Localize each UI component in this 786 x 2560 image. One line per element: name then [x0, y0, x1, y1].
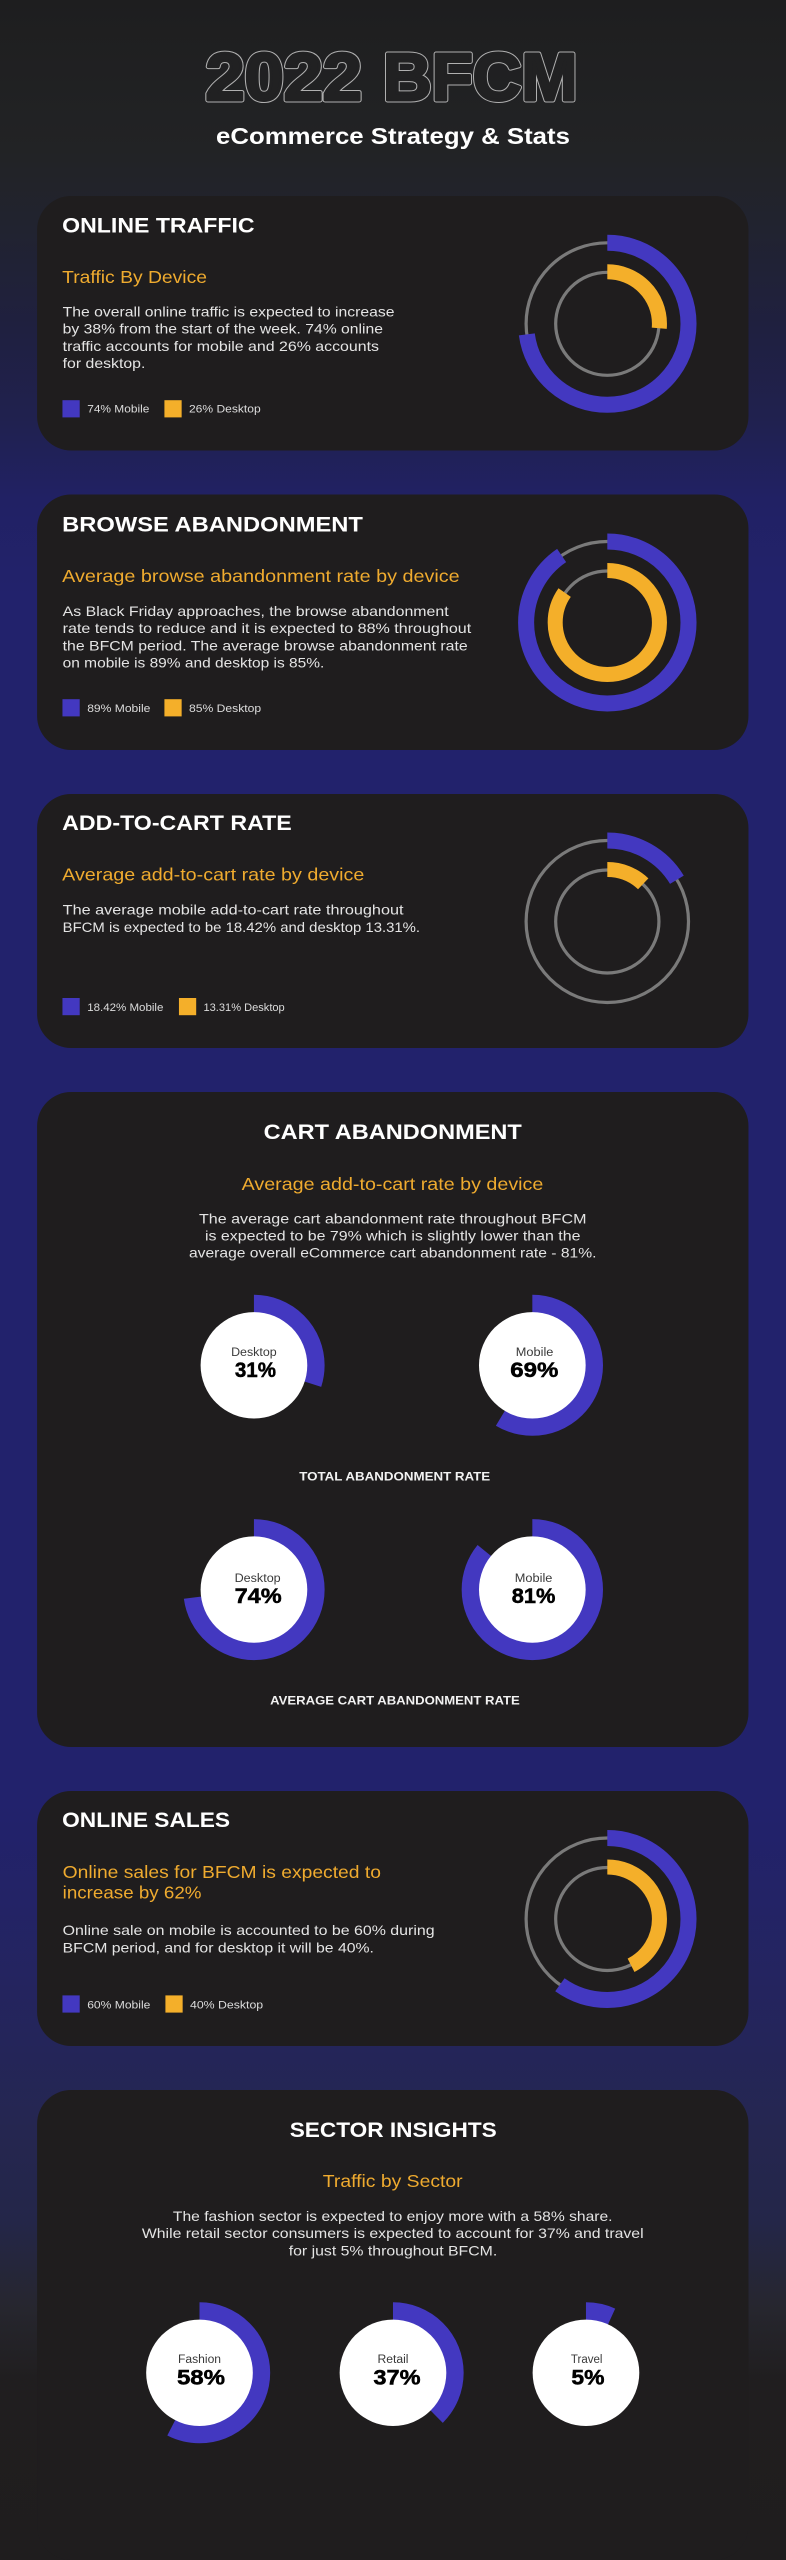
body text: BFCM is expected to be 18.42% and desktop 13.31%. — [63, 919, 420, 935]
donut: total desktop 31%: 31% — [235, 1359, 276, 1382]
heading: ONLINE TRAFFIC — [62, 215, 255, 238]
body text — [63, 1922, 435, 1956]
subheading: Average browse abandonment rate by device — [62, 566, 460, 586]
body text: the BFCM period. The average browse abandonment rate — [63, 637, 468, 653]
body text: The fashion sector is expected to enjoy more with a 58% share. — [173, 2208, 613, 2224]
subheading: Average add-to-cart rate by device — [62, 865, 365, 885]
legend: 60% Mobile — [87, 1999, 150, 2011]
heading: ADD-TO-CART RATE — [62, 812, 292, 835]
body text: is expected to be 79% which is slightly lower than the — [205, 1228, 581, 1244]
panel: add-to-cart rate — [37, 794, 748, 1048]
heading: ONLINE SALES — [62, 1809, 230, 1832]
body text: on mobile is 89% and desktop is 85%. — [63, 655, 324, 670]
body text: for just 5% throughout BFCM. — [289, 2243, 497, 2259]
heading: CART ABANDONMENT — [264, 1121, 522, 1144]
donut: average desktop 74% — [192, 1528, 316, 1651]
donut: retail 37% — [331, 2311, 455, 2434]
body text: average overall eCommerce cart abandonment rate - 81%. — [189, 1245, 596, 1261]
donut chart: traffic by device — [526, 243, 689, 405]
body text: for desktop. — [63, 355, 145, 371]
body text — [63, 303, 395, 371]
donut chart: browse abandonment — [526, 542, 689, 704]
legend: 18.42% Mobile — [87, 1002, 163, 1014]
body text — [63, 603, 471, 670]
donut: total desktop 31%: Desktop — [231, 1345, 277, 1359]
caption: average cart abandonment rate: AVERAGE CART ABANDONMENT RATE — [270, 1694, 520, 1707]
legend: 74% Mobile — [87, 404, 149, 416]
panel: online traffic — [37, 196, 748, 450]
donut: average mobile 81%: Mobile — [515, 1571, 553, 1585]
legend — [62, 1995, 263, 2013]
panel: online sales — [37, 1791, 748, 2046]
heading: BROWSE ABANDONMENT — [62, 514, 363, 537]
donut: total mobile 69%: Mobile — [516, 1345, 554, 1359]
legend — [62, 400, 261, 417]
title: BFCM — [383, 40, 577, 115]
legend — [62, 699, 261, 716]
body text: The overall online traffic is expected to increase — [63, 303, 395, 319]
body text — [63, 902, 420, 935]
panel: browse abandonment — [37, 494, 748, 750]
donut: fashion 58%: 58% — [177, 2367, 225, 2389]
legend: 89% Mobile — [87, 703, 150, 715]
title — [206, 40, 577, 115]
subheading: Traffic by Sector — [323, 2171, 463, 2191]
subtitle: eCommerce Strategy & Stats — [216, 123, 570, 149]
title: BFCM — [383, 40, 577, 115]
subheading: Traffic By Device — [62, 267, 207, 287]
donut: total desktop 31% — [192, 1304, 316, 1427]
title: 2022 — [206, 40, 362, 115]
subheading: Online sales for BFCM is expected to — [63, 1862, 381, 1882]
panel: cart abandonment — [37, 1092, 748, 1747]
donut: fashion 58%: Fashion — [178, 2352, 221, 2366]
body text: traffic accounts for mobile and 26% accounts — [63, 338, 379, 354]
donut: average desktop 74%: Desktop — [235, 1571, 281, 1585]
donut: average mobile 81% — [471, 1528, 594, 1651]
body text — [142, 2208, 644, 2259]
body text: While retail sector consumers is expected to account for 37% and travel — [142, 2225, 644, 2241]
body text: As Black Friday approaches, the browse abandonment — [63, 603, 449, 619]
donut: total mobile 69%: 69% — [510, 1359, 559, 1382]
donut: retail 37%: 37% — [373, 2367, 421, 2389]
legend: 26% Desktop — [189, 404, 261, 416]
donut: travel 5% — [524, 2311, 648, 2434]
donut: fashion 58% — [138, 2311, 261, 2434]
body text: Online sale on mobile is accounted to be 60% during — [63, 1922, 435, 1938]
legend: 85% Desktop — [189, 703, 261, 715]
legend — [62, 998, 285, 1015]
donut chart: add-to-cart — [526, 840, 689, 1002]
donut: travel 5%: 5% — [571, 2367, 605, 2389]
caption: total abandonment rate: TOTAL ABANDONMENT RATE — [299, 1469, 490, 1483]
donut chart: online sales — [526, 1838, 689, 2000]
subheading: increase by 62% — [63, 1882, 202, 1902]
body text: BFCM period, and for desktop it will be 40%. — [63, 1940, 374, 1956]
body text: by 38% from the start of the week. 74% online — [63, 321, 383, 337]
subheading — [63, 1862, 381, 1902]
legend: 40% Desktop — [190, 1999, 263, 2011]
title: 2022 — [206, 40, 362, 115]
donut: retail 37%: Retail — [377, 2352, 409, 2366]
heading: SECTOR INSIGHTS — [290, 2119, 497, 2142]
body text: The average mobile add-to-cart rate throughout — [63, 902, 404, 918]
body text: rate tends to reduce and it is expected to 88% throughout — [63, 620, 471, 636]
panel: sector insights — [37, 2090, 748, 2560]
donut: total mobile 69% — [471, 1304, 594, 1427]
body text: The average cart abandonment rate throughout BFCM — [199, 1210, 586, 1226]
donut: average desktop 74%: 74% — [235, 1585, 282, 1608]
donut: average mobile 81%: 81% — [512, 1585, 556, 1608]
donut: travel 5%: Travel — [571, 2352, 603, 2366]
body text — [189, 1210, 596, 1261]
subheading: Average add-to-cart rate by device — [242, 1174, 544, 1194]
legend: 13.31% Desktop — [204, 1002, 285, 1014]
